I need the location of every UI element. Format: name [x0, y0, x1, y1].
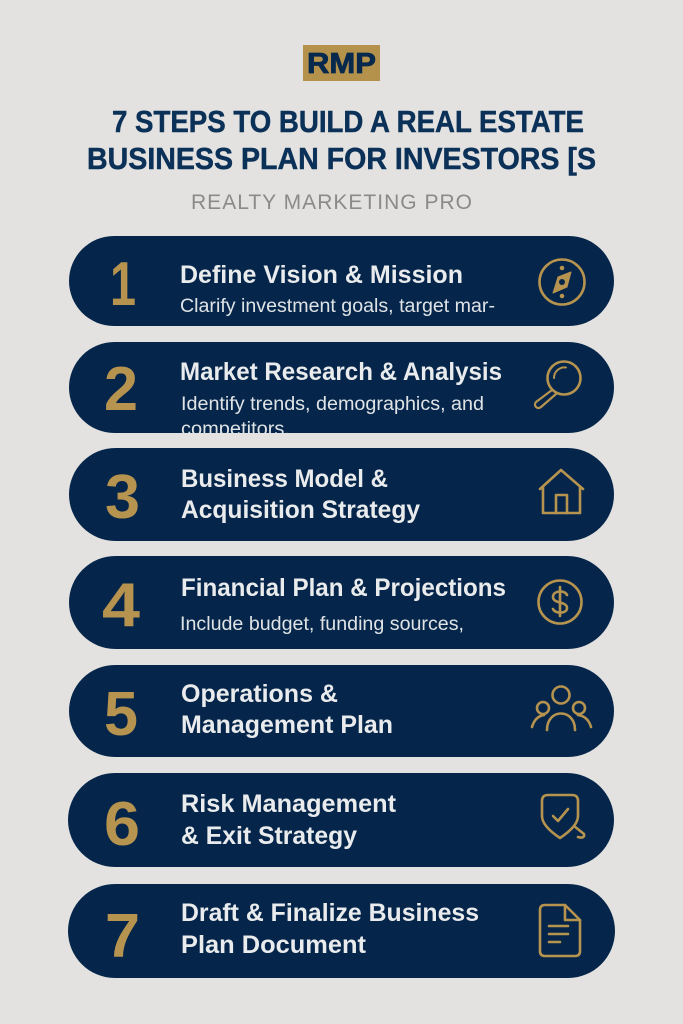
step 5 heading — [181, 680, 393, 739]
step 6 heading: Risk Management — [181, 790, 397, 818]
panel: step 4 — [69, 556, 614, 649]
icon: document — [540, 905, 580, 956]
step 5 heading: Operations & — [181, 680, 338, 708]
step 3 heading: Business Model & — [181, 465, 388, 493]
panel: step 3 — [69, 448, 614, 541]
step 4 heading: Financial Plan & Projections — [181, 574, 506, 602]
panel: step 7 — [68, 884, 615, 978]
step 7 number: 7 — [105, 902, 140, 971]
icon: dollar coin — [538, 580, 582, 624]
panel: step 2 — [69, 342, 614, 440]
step 2 description: competitors. — [181, 419, 290, 440]
step 6 heading — [181, 790, 397, 850]
logo: RMP badge: RMP — [307, 48, 376, 80]
step 3 heading — [181, 465, 420, 524]
step 6 number: 6 — [104, 790, 140, 859]
step 3 number: 3 — [105, 463, 140, 532]
icon: people — [532, 686, 591, 730]
icon: compass — [540, 260, 584, 304]
step 2 heading: Market Research & Analysis — [180, 358, 502, 386]
panel: step 6 — [68, 773, 614, 867]
step 1 description: Clarify investment goals, target mar- — [180, 296, 495, 317]
step 5 number: 5 — [104, 680, 138, 749]
step 6 heading: & Exit Strategy — [181, 822, 357, 850]
title: BUSINESS PLAN FOR INVESTORS [S — [87, 141, 596, 176]
step 3 heading: Acquisition Strategy — [181, 496, 420, 524]
icon: house — [540, 470, 583, 513]
title — [87, 104, 596, 176]
panel: step 5 — [69, 665, 614, 757]
subtitle: REALTY MARKETING PRO — [191, 191, 472, 214]
step 1 number: 1 — [110, 250, 136, 319]
icon: magnifying glass — [535, 362, 580, 408]
step 7 heading — [181, 899, 479, 959]
step 4 number: 4 — [102, 571, 141, 640]
step 5 heading: Management Plan — [181, 711, 393, 739]
step 7 heading: Plan Document — [181, 931, 367, 959]
step 2 number: 2 — [104, 355, 138, 424]
step 1 heading: Define Vision & Mission — [180, 261, 463, 289]
title: 7 STEPS TO BUILD A REAL ESTATE — [112, 104, 584, 139]
step 7 heading: Draft & Finalize Business — [181, 899, 479, 927]
step 4 description: Include budget, funding sources, — [180, 614, 464, 635]
icon: shield with check — [542, 795, 584, 838]
panel: step 1 — [69, 236, 614, 326]
step 2 description — [182, 396, 483, 433]
step 2 description: Identify trends, demographics, and — [181, 394, 484, 415]
